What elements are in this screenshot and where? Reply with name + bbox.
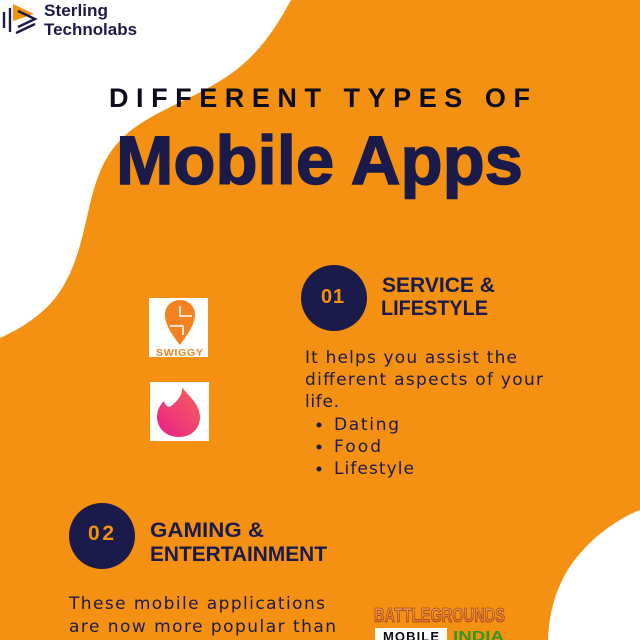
icon: Battlegrounds Mobile India logo — [374, 605, 505, 640]
title line 2: Mobile Apps — [116, 122, 523, 199]
bullet list — [316, 415, 414, 479]
icon: Swiggy logo — [149, 298, 208, 359]
icon: Swiggy logo: SWIGGY — [156, 347, 203, 359]
heading 02: GAMING & — [150, 519, 264, 542]
bullet list: Food — [334, 437, 381, 457]
description 02: These mobile applications — [68, 594, 325, 614]
description 02: are now more popular than — [69, 617, 336, 637]
bullet list: Dating — [334, 415, 399, 435]
icon: Battlegrounds Mobile India logo: BATTLEGROUNDS — [374, 605, 505, 627]
number badge 02: 02 — [88, 522, 114, 545]
logo: Sterling Technolabs — [4, 1, 137, 39]
heading 01: LIFESTYLE — [381, 297, 488, 320]
description 01: life. — [305, 392, 339, 412]
number badge 01 — [301, 265, 367, 331]
logo text: Sterling — [44, 1, 108, 20]
number badge 02 — [69, 503, 135, 569]
section 02: gaming and entertainment — [68, 503, 336, 637]
heading 02: ENTERTAINMENT — [150, 543, 327, 566]
number badge 01: 01 — [321, 286, 344, 308]
logo text: Technolabs — [44, 20, 137, 39]
bullet list: Lifestyle — [334, 459, 414, 479]
title line 1: DIFFERENT TYPES OF — [109, 83, 530, 113]
description 01: different aspects of your — [305, 370, 543, 390]
icon: play triangle logo — [4, 4, 35, 33]
icon: Tinder logo — [150, 382, 209, 441]
heading 01: SERVICE & — [382, 274, 495, 297]
section 01: service and lifestyle — [301, 265, 543, 479]
description 01: It helps you assist the — [305, 348, 517, 368]
